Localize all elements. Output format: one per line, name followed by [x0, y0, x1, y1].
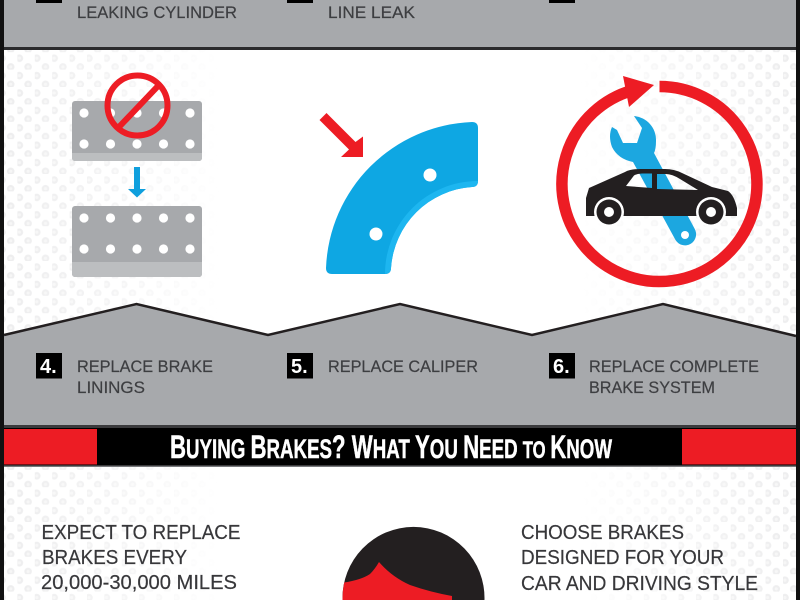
blue down arrow	[128, 167, 146, 198]
panel: top causes strip	[0, 0, 800, 50]
text block: replacement interval: 20,000-30,000 MILES	[41, 572, 237, 594]
banner: buying brakes heading	[0, 425, 800, 467]
text block: choose suitable brakes: DESIGNED FOR YOUR	[521, 547, 724, 569]
red pointer arrow	[320, 113, 363, 157]
number badge: 3	[549, 0, 575, 3]
red circular arrow	[562, 76, 757, 281]
step 4: LININGS	[77, 378, 145, 397]
step 5: REPLACE CALIPER	[328, 357, 478, 376]
icon: replace caliper	[320, 113, 478, 274]
heading text: BUYING BRAKES? WHAT YOU NEED TO KNOW	[170, 429, 612, 465]
step 6: BRAKE SYSTEM	[589, 378, 715, 397]
step 5: 5.	[291, 356, 308, 378]
blue caliper	[326, 122, 478, 274]
old brake lining	[72, 101, 202, 161]
panel: zigzag solutions strip	[4, 304, 796, 426]
text block: choose suitable brakes: CHOOSE BRAKES	[521, 522, 684, 544]
new brake lining	[72, 206, 202, 277]
text block: replacement interval: EXPECT TO REPLACE	[42, 522, 240, 544]
text block: choose suitable brakes: CAR AND DRIVING STYLE	[521, 573, 758, 595]
black car	[586, 169, 737, 227]
step 6	[549, 353, 759, 397]
label: line leak: LINE LEAK	[328, 3, 416, 22]
prohibition sign	[108, 76, 168, 136]
number badge: 2	[287, 0, 313, 3]
label: leaking cylinder: LEAKING CYLINDER	[77, 3, 237, 22]
icon: round head with red face	[335, 527, 484, 600]
step 4: REPLACE BRAKE	[77, 357, 213, 376]
icon: replace complete brake system	[562, 76, 757, 281]
step 5	[287, 353, 478, 378]
text block: replacement interval: BRAKES EVERY	[42, 547, 187, 569]
number badge: 1	[36, 0, 62, 3]
step 4	[36, 353, 213, 397]
blue wrench	[610, 116, 696, 245]
icon: replace brake linings	[72, 76, 202, 277]
text block: replacement interval	[41, 522, 240, 594]
step 6: REPLACE COMPLETE	[589, 357, 759, 376]
step 6: 6.	[553, 356, 570, 378]
text block: choose suitable brakes	[521, 522, 758, 595]
step 4: 4.	[40, 356, 57, 378]
